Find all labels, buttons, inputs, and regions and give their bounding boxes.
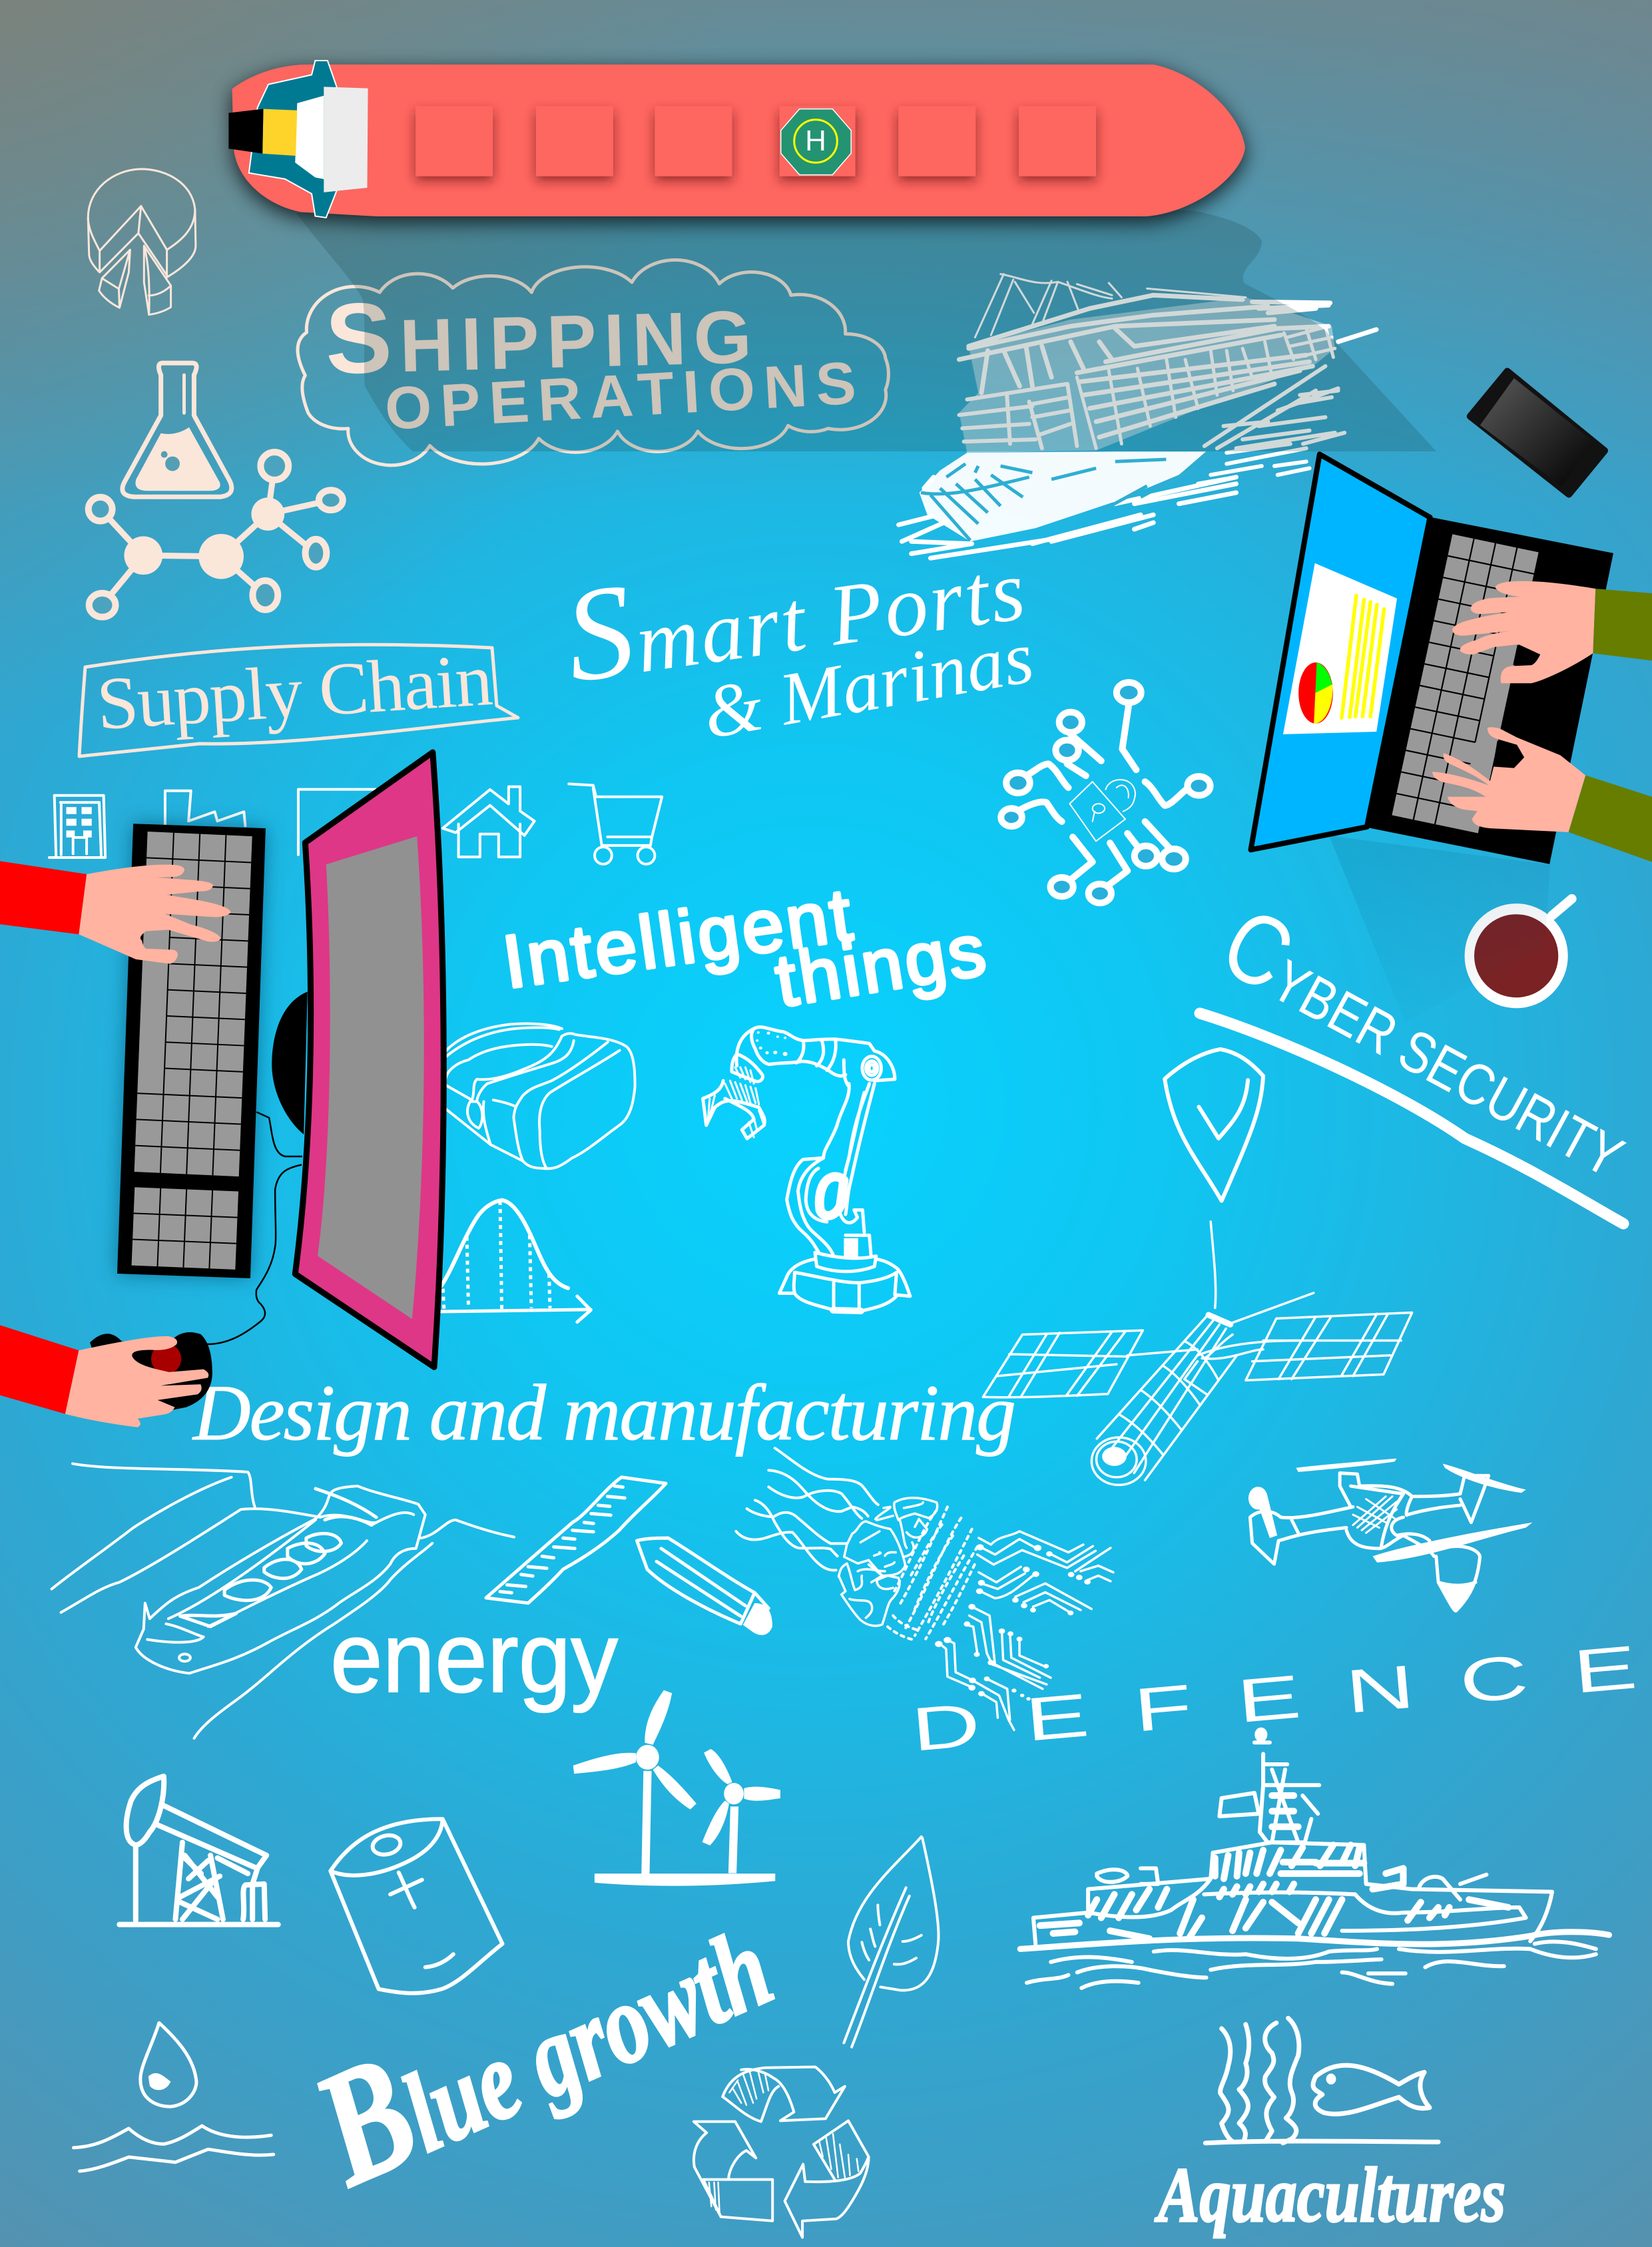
sketch: container ship: [899, 274, 1376, 558]
laptop base: [1368, 517, 1613, 864]
hand: left on keyboard: [0, 861, 231, 964]
monitor: [295, 752, 443, 1367]
cargo hatches: [415, 106, 1096, 180]
icon: battery: [330, 1819, 502, 1993]
icon: satellite: [983, 1222, 1412, 1485]
icon: coffee cup: [1465, 899, 1572, 1008]
hand: left on mouse: [0, 1325, 208, 1427]
icon: wind turbines: [573, 1690, 780, 1886]
label: smart ports and marinas: [556, 501, 1039, 755]
icon: VR headset: [445, 1024, 635, 1168]
smartphone: [1470, 371, 1605, 495]
label: supply chain: Supply Chain: [95, 638, 495, 746]
heading: Shipping Operations: SHIPPING: [324, 272, 753, 395]
icon: fish and seaweed: [1205, 2018, 1438, 2143]
laptop keys: [1392, 534, 1539, 833]
icon: drone: [1248, 1459, 1532, 1611]
laptop screen: [1251, 454, 1430, 850]
keyboard: [117, 824, 266, 1278]
label: design and manufacturing: Design and manufacturing: [192, 1368, 1016, 1457]
icon: office building: [49, 796, 105, 858]
label: aquacultures: Aquacultures: [1154, 2151, 1506, 2238]
label: energy: energy: [330, 1601, 618, 1713]
icon: pencil: [637, 1538, 772, 1635]
icon: shield with tick: [1165, 1049, 1263, 1201]
mouse: [90, 1332, 212, 1413]
cables: [207, 1112, 302, 1344]
heading: Shipping Operations: OPERATIONS: [384, 350, 858, 443]
icon: shopping cart: [569, 784, 662, 864]
label: defence: DEFENCE: [909, 1632, 1639, 1764]
icon: circuit padlock: [1001, 682, 1211, 903]
icon: oil pump: [119, 1776, 278, 1925]
icon: leaf: [844, 1837, 939, 2047]
icon: brain and circuits: [736, 1448, 1113, 1730]
label: smart ports and marinas: & Marinas: [697, 616, 1039, 755]
icon: helipad: H: [805, 125, 826, 157]
cloud outline: [298, 260, 888, 465]
laptop shadow: [1329, 836, 1550, 1023]
icon: factory: [165, 791, 245, 826]
icon: robot arm: [703, 1027, 910, 1311]
ship bridge: [228, 61, 368, 218]
label: smart ports and marinas: Smart Ports: [556, 501, 1031, 711]
icon: house: [443, 787, 535, 857]
monitor stand: [272, 991, 308, 1134]
label: intelligent things: [498, 873, 991, 1023]
icon: helipad: [781, 109, 851, 175]
label: blue growth: Blue growth: [289, 1864, 793, 2220]
laptop: [1251, 454, 1652, 864]
hand: bottom right: [1432, 727, 1652, 862]
cargo ship top view: [228, 61, 1245, 222]
icon: chemistry flask: [123, 363, 232, 497]
icon: warship: [1020, 1730, 1609, 1988]
icon: recycling symbol: [694, 2067, 869, 2238]
heading: Shipping Operations: [324, 272, 858, 443]
icon: warehouse behind monitor: [298, 790, 376, 855]
icon: molecule: [89, 452, 343, 617]
document on screen: [1283, 563, 1397, 734]
icon: water drop and waves: [74, 2023, 274, 2171]
icon: cheese wheel with wedges: [88, 169, 196, 315]
label: intelligent things: things: [770, 909, 991, 1023]
ship shadow: [296, 210, 1436, 451]
icon: ruler: [486, 1477, 666, 1603]
desktop computer: [0, 752, 443, 1427]
hand: top right: [1452, 581, 1652, 683]
chart: bell curve: [440, 1200, 591, 1322]
icon: LNG tanker at quay: [52, 1463, 514, 1738]
label: intelligent things: Intelligent: [498, 873, 856, 1004]
ship hull: [232, 65, 1245, 222]
